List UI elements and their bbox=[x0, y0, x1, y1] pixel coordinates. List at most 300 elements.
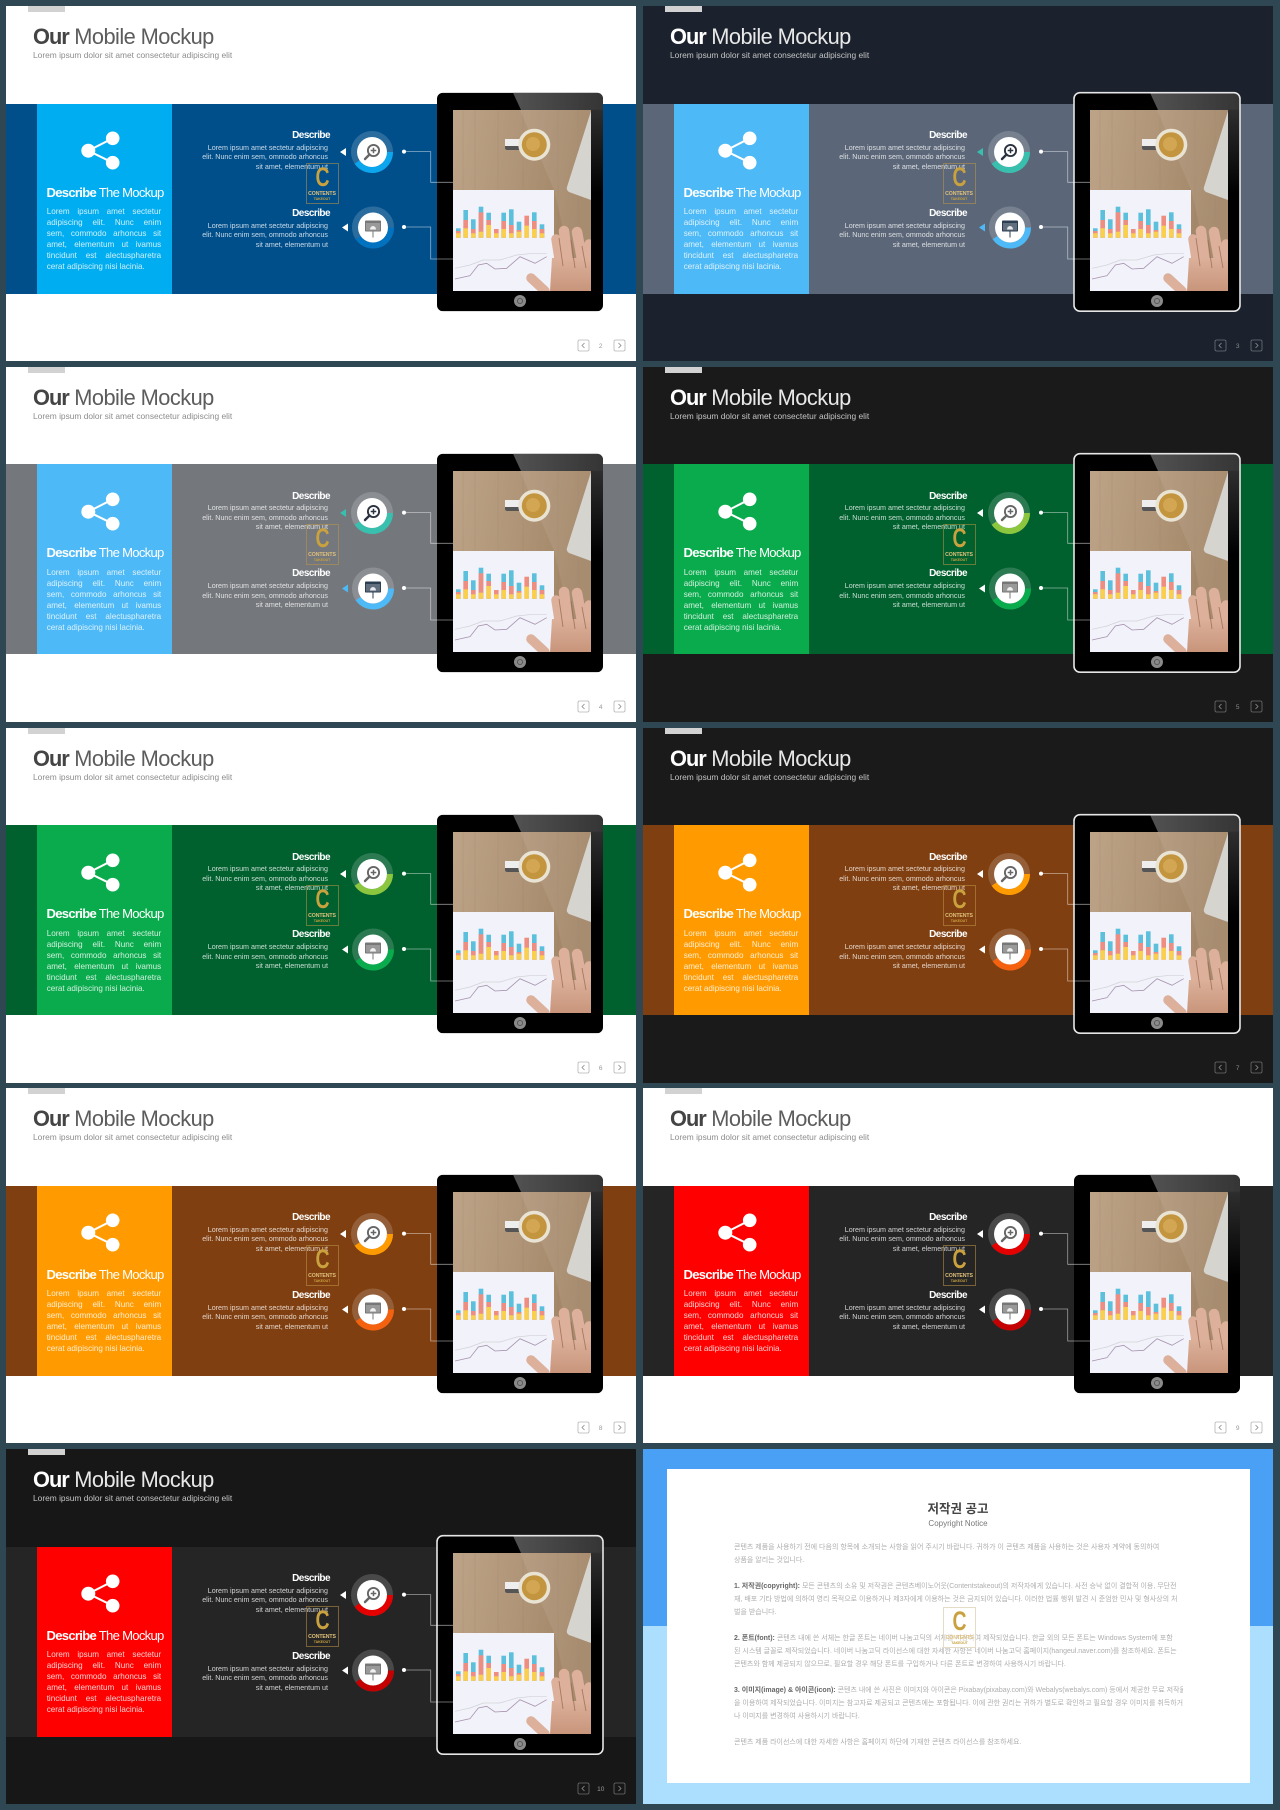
panel body: cerat adipiscing nisi lacinia. bbox=[47, 1705, 145, 1714]
item 1 text: sit amet, elementum ut bbox=[256, 884, 328, 892]
watermark bbox=[943, 1607, 976, 1648]
watermark bbox=[942, 163, 976, 204]
panel body: cerat adipiscing nisi lacinia. bbox=[684, 262, 782, 271]
connector dot 2 bbox=[1039, 586, 1043, 590]
panel body: amet, elementum ut ivamus bbox=[47, 1322, 161, 1331]
tablet bbox=[1074, 814, 1240, 1033]
connector dot 1 bbox=[402, 871, 406, 875]
item 1 text: elit. Nunc enim sem, ommodo arhoncus bbox=[202, 514, 328, 522]
item 1 heading: Describe bbox=[929, 491, 967, 502]
connector 1 bbox=[404, 1595, 453, 1625]
item 1 text: elit. Nunc enim sem, ommodo arhoncus bbox=[202, 1596, 328, 1604]
notice subheading: Copyright Notice bbox=[928, 1519, 988, 1528]
item 2 heading: Describe bbox=[929, 568, 967, 579]
panel body: sem, commodo arhoncus sit bbox=[47, 951, 161, 960]
slide 9: red and charcoal on white bbox=[643, 1088, 1273, 1443]
panel body: Lorem ipsum amet sectetur bbox=[47, 1289, 161, 1298]
panel: describe the mockup bbox=[37, 464, 172, 654]
arrow 1 bbox=[977, 148, 983, 156]
connector 1 bbox=[404, 873, 453, 904]
arrow 2 bbox=[342, 584, 348, 592]
icon ring: magnifier bbox=[354, 856, 390, 892]
panel body: adipiscing elit. Nunc enim bbox=[47, 579, 161, 588]
panel body: sem, commodo arhoncus sit bbox=[684, 229, 798, 238]
title: Our Mobile Mockup bbox=[33, 24, 214, 49]
watermark: CONTENTS bbox=[308, 1634, 336, 1640]
panel body: amet, elementum ut ivamus bbox=[47, 240, 161, 249]
slide 7: orange on black bbox=[643, 728, 1273, 1082]
connector dot 2 bbox=[1039, 946, 1043, 950]
item 2 heading: Describe bbox=[292, 929, 330, 940]
clause 3: 을 이용하여 제작되었습니다. 이미지는 참고자료 제공되고 콘텐츠에는 포함됩니다. 이에 관한 권리는 귀하가 별도로 확인하고 필요할 경우 이미지를 취득하거 bbox=[734, 1700, 1183, 1707]
panel body: Lorem ipsum amet sectetur bbox=[684, 929, 798, 938]
panel body bbox=[684, 568, 798, 632]
connector 2 bbox=[1041, 948, 1090, 980]
diagram: share icon, rings, connectors, tablet bbox=[718, 452, 1262, 712]
pagination bbox=[578, 1783, 625, 1794]
title: Our Mobile Mockup bbox=[33, 746, 214, 770]
watermark bbox=[942, 524, 976, 565]
connector 1 bbox=[1041, 1234, 1090, 1265]
item 2 text: Lorem ipsum amet sectetur adipiscing bbox=[208, 1304, 328, 1312]
panel body: Lorem ipsum amet sectetur bbox=[47, 1650, 161, 1659]
item 2 text: elit. Nunc enim sem, ommodo arhoncus bbox=[839, 953, 965, 961]
item 1 text: sit amet, elementum ut bbox=[893, 1245, 965, 1253]
tablet bbox=[1074, 93, 1240, 311]
pagination bbox=[1215, 340, 1262, 351]
panel body: tincidunt est alectuspharetra bbox=[47, 251, 161, 260]
panel body: Lorem ipsum amet sectetur bbox=[684, 207, 798, 216]
connector dot 1 bbox=[1039, 1232, 1043, 1236]
clause 1: 1. 저작권(copyright): 모든 콘텐츠의 소유 및 저작권은 콘텐츠베이노어웃(Contentstakeout)의 저작자에게 있습니다. 사전 승낙 없이 결합적 이용, 무단전 bbox=[734, 1583, 1177, 1590]
icon: share bbox=[718, 132, 756, 170]
colour band bbox=[6, 1186, 636, 1376]
connector dot 2 bbox=[402, 1668, 406, 1672]
watermark bbox=[306, 524, 338, 565]
arrow 2 bbox=[342, 224, 348, 232]
watermark: TAKEOUT bbox=[314, 1279, 330, 1283]
diagram: share icon, rings, connectors, tablet bbox=[81, 814, 626, 1074]
panel body: sem, commodo arhoncus sit bbox=[684, 951, 798, 960]
subtitle: Lorem ipsum dolor sit amet consectetur adipiscing elit bbox=[670, 411, 869, 421]
connector 1 bbox=[1041, 152, 1090, 182]
tablet outline bbox=[1074, 93, 1240, 311]
connector 2 bbox=[1041, 227, 1090, 259]
watermark: TAKEOUT bbox=[314, 1640, 330, 1644]
tablet bbox=[437, 1536, 603, 1754]
watermark: CONTENTS bbox=[308, 191, 336, 197]
panel body: tincidunt est alectuspharetra bbox=[684, 1333, 798, 1342]
connector dot 2 bbox=[402, 225, 406, 229]
panel body bbox=[684, 207, 798, 271]
connector 2 bbox=[404, 948, 453, 980]
panel heading: Describe The Mockup bbox=[46, 906, 164, 921]
panel body bbox=[46, 568, 162, 632]
item 2 text: sit amet, elementum ut bbox=[893, 601, 965, 609]
icon ring: magnifier bbox=[991, 1216, 1027, 1252]
item 2 text: sit amet, elementum ut bbox=[256, 962, 328, 970]
item 1 text: Lorem ipsum amet sectetur adipiscing bbox=[208, 1587, 328, 1595]
intro text: 콘텐츠 제품을 사용하기 전에 다음의 항목에 소개되는 사항을 읽어 주시기 바랍니다. 귀하가 이 콘텐츠 제품을 사용하는 것은 사용자 계약에 동의하여 bbox=[734, 1544, 1159, 1551]
connector dot 1 bbox=[402, 510, 406, 514]
panel: describe the mockup bbox=[37, 104, 172, 294]
panel body: sem, commodo arhoncus sit bbox=[47, 229, 161, 238]
arrow 1 bbox=[340, 1591, 346, 1599]
item 2 text: Lorem ipsum amet sectetur adipiscing bbox=[208, 1665, 328, 1673]
panel body: amet, elementum ut ivamus bbox=[47, 601, 161, 610]
item 2 heading: Describe bbox=[929, 929, 967, 940]
arrow 1 bbox=[977, 1230, 983, 1238]
item 2 heading: Describe bbox=[292, 1290, 330, 1301]
icon: share bbox=[718, 1214, 756, 1252]
watermark: TAKEOUT bbox=[314, 558, 330, 562]
panel body: tincidunt est alectuspharetra bbox=[47, 612, 161, 621]
item 1 text: Lorem ipsum amet sectetur adipiscing bbox=[208, 1226, 328, 1234]
tablet outline bbox=[1074, 814, 1240, 1033]
slide 6: green on white bbox=[6, 728, 636, 1082]
item 2 text: elit. Nunc enim sem, ommodo arhoncus bbox=[202, 231, 328, 239]
item 2 text: elit. Nunc enim sem, ommodo arhoncus bbox=[202, 592, 328, 600]
top tab bbox=[28, 1449, 65, 1455]
item 2 text bbox=[815, 1304, 965, 1332]
diagram: share icon, rings, connectors, tablet bbox=[718, 92, 1262, 352]
icon: share bbox=[81, 132, 119, 170]
watermark: TAKEOUT bbox=[951, 558, 967, 562]
panel heading: Describe The Mockup bbox=[46, 545, 164, 560]
arrow 1 bbox=[340, 509, 346, 517]
slide 10: red and charcoal on black bbox=[6, 1449, 636, 1804]
arrow 1 bbox=[340, 148, 346, 156]
item 2 text bbox=[202, 582, 328, 609]
connector dot 2 bbox=[1039, 1307, 1043, 1311]
panel body bbox=[46, 929, 162, 993]
connector 1 bbox=[1041, 873, 1090, 904]
item 1 text: elit. Nunc enim sem, ommodo arhoncus bbox=[839, 1235, 965, 1243]
item 2 text bbox=[202, 222, 328, 249]
pagination bbox=[1215, 1062, 1262, 1072]
icon: share bbox=[81, 492, 119, 530]
panel body: Lorem ipsum amet sectetur bbox=[684, 1289, 798, 1298]
connector 2 bbox=[404, 227, 453, 259]
colour band bbox=[6, 104, 636, 294]
item 2 text: Lorem ipsum amet sectetur adipiscing bbox=[208, 582, 328, 590]
item 2 text: sit amet, elementum ut bbox=[893, 241, 965, 249]
panel body: cerat adipiscing nisi lacinia. bbox=[684, 984, 782, 993]
panel body: adipiscing elit. Nunc enim bbox=[684, 218, 798, 227]
item 2 text: sit amet, elementum ut bbox=[256, 241, 328, 249]
item 2 text bbox=[839, 582, 965, 609]
panel body bbox=[684, 1288, 798, 1354]
icon: share bbox=[81, 1574, 119, 1612]
tablet bbox=[1074, 453, 1240, 672]
colour band bbox=[6, 1546, 636, 1736]
clause 3: 3. 이미지(image) & 아이콘(icon): 콘텐츠 내에 쓴 사진은 이미지와 아이콘은 Pixabay(pixabay.com)와 Webalys(webalys.com) 등에서 제공한 무료 저작물 bbox=[734, 1687, 1183, 1694]
title: Our Mobile Mockup bbox=[670, 385, 851, 410]
tablet bbox=[437, 453, 603, 672]
item 2 heading: Describe bbox=[292, 568, 330, 579]
item 2 text: Lorem ipsum amet sectetur adipiscing bbox=[845, 943, 965, 951]
item 2 text: elit. Nunc enim sem, ommodo arhoncus bbox=[202, 1674, 328, 1682]
arrow 1 bbox=[977, 870, 983, 878]
arrow 1 bbox=[340, 870, 346, 878]
arrow 2 bbox=[979, 1306, 985, 1314]
pagination bbox=[578, 1062, 625, 1072]
panel: describe the mockup bbox=[674, 464, 809, 654]
panel body: adipiscing elit. Nunc enim bbox=[684, 1300, 798, 1309]
item 1 text: elit. Nunc enim sem, ommodo arhoncus bbox=[839, 514, 965, 522]
watermark: CONTENTS bbox=[308, 912, 336, 918]
arrow 2 bbox=[342, 1306, 348, 1314]
watermark bbox=[306, 1606, 338, 1647]
colour band bbox=[643, 825, 1273, 1015]
panel body: cerat adipiscing nisi lacinia. bbox=[47, 623, 145, 632]
colour band bbox=[643, 464, 1273, 654]
panel body: tincidunt est alectuspharetra bbox=[47, 1333, 161, 1342]
panel body: tincidunt est alectuspharetra bbox=[684, 251, 798, 260]
title: Our Mobile Mockup bbox=[33, 1106, 214, 1131]
tablet bbox=[437, 93, 603, 311]
watermark: TAKEOUT bbox=[314, 918, 330, 922]
slide 4: grey on white bbox=[6, 367, 636, 722]
subtitle: Lorem ipsum dolor sit amet consectetur adipiscing elit bbox=[33, 772, 232, 782]
item 1 text: elit. Nunc enim sem, ommodo arhoncus bbox=[839, 153, 965, 161]
icon ring: board bbox=[355, 210, 391, 246]
panel body: amet, elementum ut ivamus bbox=[47, 1683, 161, 1692]
item 2 text: sit amet, elementum ut bbox=[256, 1684, 328, 1692]
watermark: CONTENTS bbox=[945, 1273, 973, 1279]
panel body: Lorem ipsum amet sectetur bbox=[47, 207, 161, 216]
subtitle: Lorem ipsum dolor sit amet consectetur adipiscing elit bbox=[670, 50, 869, 60]
item 1 heading: Describe bbox=[292, 1212, 330, 1223]
item 1 text bbox=[178, 1587, 328, 1615]
panel: describe the mockup bbox=[674, 825, 809, 1015]
item 1 text: elit. Nunc enim sem, ommodo arhoncus bbox=[202, 153, 328, 161]
subtitle: Lorem ipsum dolor sit amet consectetur adipiscing elit bbox=[670, 1132, 869, 1142]
panel heading: Describe The Mockup bbox=[46, 1267, 164, 1282]
clause 2 bbox=[734, 1632, 1183, 1671]
arrow 2 bbox=[342, 1666, 348, 1674]
panel heading: Describe The Mockup bbox=[684, 1267, 801, 1282]
item 1 text bbox=[202, 504, 328, 531]
item 2 heading: Describe bbox=[929, 208, 967, 219]
item 1 text: sit amet, elementum ut bbox=[256, 523, 328, 531]
subtitle: Lorem ipsum dolor sit amet consectetur adipiscing elit bbox=[33, 1493, 232, 1503]
item 1 text: sit amet, elementum ut bbox=[256, 163, 328, 171]
panel body: cerat adipiscing nisi lacinia. bbox=[47, 984, 145, 993]
subtitle: Lorem ipsum dolor sit amet consectetur adipiscing elit bbox=[33, 1132, 232, 1142]
arrow 2 bbox=[979, 945, 985, 953]
item 1 heading: Describe bbox=[929, 1212, 967, 1223]
item 2 text: elit. Nunc enim sem, ommodo arhoncus bbox=[202, 953, 328, 961]
panel heading: Describe The Mockup bbox=[684, 545, 801, 560]
panel body: tincidunt est alectuspharetra bbox=[47, 1694, 161, 1703]
item 2 heading: Describe bbox=[292, 1651, 330, 1662]
top tab bbox=[665, 728, 702, 734]
colour band bbox=[643, 1186, 1273, 1376]
diagram: share icon, rings, connectors, tablet bbox=[718, 814, 1262, 1074]
intro text: 상품을 알리는 것입니다. bbox=[734, 1557, 804, 1564]
watermark: CONTENTS bbox=[946, 1635, 973, 1641]
top tab bbox=[665, 367, 702, 373]
item 2 text bbox=[202, 943, 328, 970]
panel body bbox=[684, 929, 798, 993]
panel: describe the mockup bbox=[37, 825, 172, 1015]
item 2 text bbox=[839, 943, 965, 970]
item 1 heading: Describe bbox=[292, 491, 330, 502]
item 2 text: sit amet, elementum ut bbox=[893, 962, 965, 970]
pagination: 8 bbox=[599, 1425, 603, 1432]
clause 2: 2. 폰트(font): 콘텐츠 내에 쓴 서체는 한글 폰트는 네이버 나눔고딕의 서체를 사용하여 제작되었습니다. 한글 외의 모든 폰트는 Windows System에 포함 bbox=[734, 1635, 1173, 1642]
item 1 heading: Describe bbox=[929, 852, 967, 862]
clause 1: 재, 배포 기타 방법에 의하여 영리 목적으로 이용하거나 제3자에게 이용하는 것은 금지되어 있습니다. 이러한 법률 행위 발견 시 준엄한 민사 및 형사상의 처 bbox=[734, 1596, 1177, 1603]
item 1 text bbox=[839, 144, 965, 171]
intro text bbox=[734, 1541, 1183, 1567]
watermark: CONTENTS bbox=[945, 912, 973, 918]
panel heading: Describe The Mockup bbox=[684, 185, 801, 200]
connector dot 1 bbox=[1039, 871, 1043, 875]
panel body: Lorem ipsum amet sectetur bbox=[47, 568, 161, 577]
pagination: 5 bbox=[1236, 704, 1240, 711]
item 2 text: sit amet, elementum ut bbox=[256, 1323, 328, 1331]
item 1 heading: Describe bbox=[929, 130, 967, 141]
watermark: TAKEOUT bbox=[951, 197, 967, 201]
panel body: adipiscing elit. Nunc enim bbox=[47, 1300, 161, 1309]
diagram: share icon, rings, connectors, tablet bbox=[6, 1449, 636, 1804]
watermark: TAKEOUT bbox=[951, 1641, 968, 1645]
colour band bbox=[6, 825, 636, 1015]
colour band bbox=[643, 104, 1273, 294]
icon: share bbox=[718, 492, 756, 530]
clause 2: 된 시스템 글꼴로 제작되었습니다. 네이버 나눔고딕 라이선스에 대한 자세한 사항은 네이버 나눔고딕 홈페이지(hangeul.naver.com)를 참조하세요. 폰트는 bbox=[734, 1648, 1177, 1655]
panel body: sem, commodo arhoncus sit bbox=[684, 1311, 798, 1320]
item 1 text: sit amet, elementum ut bbox=[256, 1606, 328, 1614]
item 2 text bbox=[178, 1304, 328, 1332]
connector dot 2 bbox=[1039, 225, 1043, 229]
item 2 text bbox=[178, 1665, 328, 1693]
panel: describe the mockup bbox=[37, 1186, 172, 1376]
slide 3: slate on navy bbox=[643, 6, 1273, 361]
item 1 text: sit amet, elementum ut bbox=[893, 163, 965, 171]
tablet outline bbox=[437, 1536, 603, 1754]
clause 3 bbox=[734, 1684, 1183, 1723]
arrow 2 bbox=[979, 584, 985, 592]
icon ring: magnifier bbox=[991, 134, 1027, 170]
panel body: sem, commodo arhoncus sit bbox=[47, 590, 161, 599]
item 1 text: Lorem ipsum amet sectetur adipiscing bbox=[845, 1226, 965, 1234]
panel heading: Describe The Mockup bbox=[684, 906, 801, 921]
clause 1 bbox=[734, 1580, 1183, 1619]
subtitle: Lorem ipsum dolor sit amet consectetur adipiscing elit bbox=[33, 411, 232, 421]
item 2 heading: Describe bbox=[292, 208, 330, 219]
connector 2 bbox=[404, 1670, 453, 1702]
icon: share bbox=[718, 853, 756, 891]
diagram: share icon, rings, connectors, tablet bbox=[81, 92, 626, 352]
pagination bbox=[1215, 1422, 1262, 1433]
panel heading: Describe The Mockup bbox=[46, 185, 164, 200]
panel body: sem, commodo arhoncus sit bbox=[47, 1311, 161, 1320]
panel body: Lorem ipsum amet sectetur bbox=[684, 568, 798, 577]
watermark: TAKEOUT bbox=[951, 918, 967, 922]
connector dot 1 bbox=[402, 1232, 406, 1236]
slide 8: orange on white bbox=[6, 1088, 636, 1443]
connector dot 2 bbox=[402, 946, 406, 950]
connector dot 1 bbox=[402, 150, 406, 154]
icon ring: magnifier bbox=[354, 495, 390, 531]
top tab bbox=[28, 6, 65, 12]
item 2 text: Lorem ipsum amet sectetur adipiscing bbox=[208, 943, 328, 951]
pagination: 10 bbox=[597, 1786, 605, 1793]
subtitle: Lorem ipsum dolor sit amet consectetur adipiscing elit bbox=[33, 50, 232, 60]
panel body: cerat adipiscing nisi lacinia. bbox=[684, 623, 782, 632]
item 1 text bbox=[202, 144, 328, 171]
title: Our Mobile Mockup bbox=[670, 746, 851, 770]
diagram: share icon, rings, connectors, tablet bbox=[81, 454, 626, 712]
item 2 text: Lorem ipsum amet sectetur adipiscing bbox=[845, 222, 965, 230]
top tab bbox=[665, 6, 702, 12]
watermark bbox=[306, 163, 338, 204]
title: Our Mobile Mockup bbox=[670, 1106, 851, 1131]
top tab bbox=[28, 1088, 65, 1094]
item 2 heading: Describe bbox=[929, 1290, 967, 1301]
connector 1 bbox=[404, 512, 453, 543]
connector 2 bbox=[404, 1309, 453, 1341]
top tab bbox=[665, 1088, 702, 1094]
panel body: Lorem ipsum amet sectetur bbox=[47, 929, 161, 938]
top tab bbox=[28, 728, 65, 734]
title: Our Mobile Mockup bbox=[33, 1467, 214, 1492]
panel body: amet, elementum ut ivamus bbox=[684, 601, 798, 610]
top tab bbox=[28, 367, 65, 373]
panel body: adipiscing elit. Nunc enim bbox=[684, 579, 798, 588]
watermark: TAKEOUT bbox=[951, 1279, 967, 1283]
watermark: CONTENTS bbox=[308, 1273, 336, 1279]
white notice card bbox=[666, 1469, 1250, 1783]
connector 1 bbox=[404, 152, 453, 182]
connector 1 bbox=[404, 1234, 453, 1265]
panel body: tincidunt est alectuspharetra bbox=[684, 612, 798, 621]
panel body: cerat adipiscing nisi lacinia. bbox=[47, 262, 145, 271]
icon: share bbox=[81, 853, 119, 891]
item 2 text: elit. Nunc enim sem, ommodo arhoncus bbox=[839, 592, 965, 600]
panel body bbox=[47, 1649, 161, 1715]
connector 1 bbox=[1041, 512, 1090, 543]
tablet bbox=[437, 814, 603, 1033]
clause 1: 벌을 받습니다. bbox=[734, 1609, 777, 1616]
tablet bbox=[1074, 1175, 1240, 1393]
icon ring: board bbox=[355, 931, 391, 967]
item 2 text: elit. Nunc enim sem, ommodo arhoncus bbox=[839, 231, 965, 239]
watermark: CONTENTS bbox=[308, 552, 336, 558]
panel: describe the mockup bbox=[674, 104, 809, 294]
colour band bbox=[6, 464, 636, 654]
notice heading: 저작권 공고 bbox=[928, 1502, 988, 1516]
arrow 2 bbox=[342, 945, 348, 953]
item 1 text: Lorem ipsum amet sectetur adipiscing bbox=[208, 504, 328, 512]
item 2 text: sit amet, elementum ut bbox=[893, 1323, 965, 1331]
pagination: 9 bbox=[1236, 1425, 1240, 1432]
item 2 text: sit amet, elementum ut bbox=[256, 601, 328, 609]
watermark: TAKEOUT bbox=[314, 197, 330, 201]
pagination: 4 bbox=[599, 704, 603, 711]
panel body: adipiscing elit. Nunc enim bbox=[47, 1661, 161, 1670]
panel body: sem, commodo arhoncus sit bbox=[47, 1672, 161, 1681]
diagram: share icon, rings, connectors, tablet bbox=[81, 1174, 626, 1434]
panel body: adipiscing elit. Nunc enim bbox=[47, 218, 161, 227]
icon ring: magnifier bbox=[354, 1216, 390, 1252]
panel body: amet, elementum ut ivamus bbox=[684, 240, 798, 249]
panel body: adipiscing elit. Nunc enim bbox=[47, 940, 161, 949]
panel body bbox=[46, 1289, 162, 1353]
